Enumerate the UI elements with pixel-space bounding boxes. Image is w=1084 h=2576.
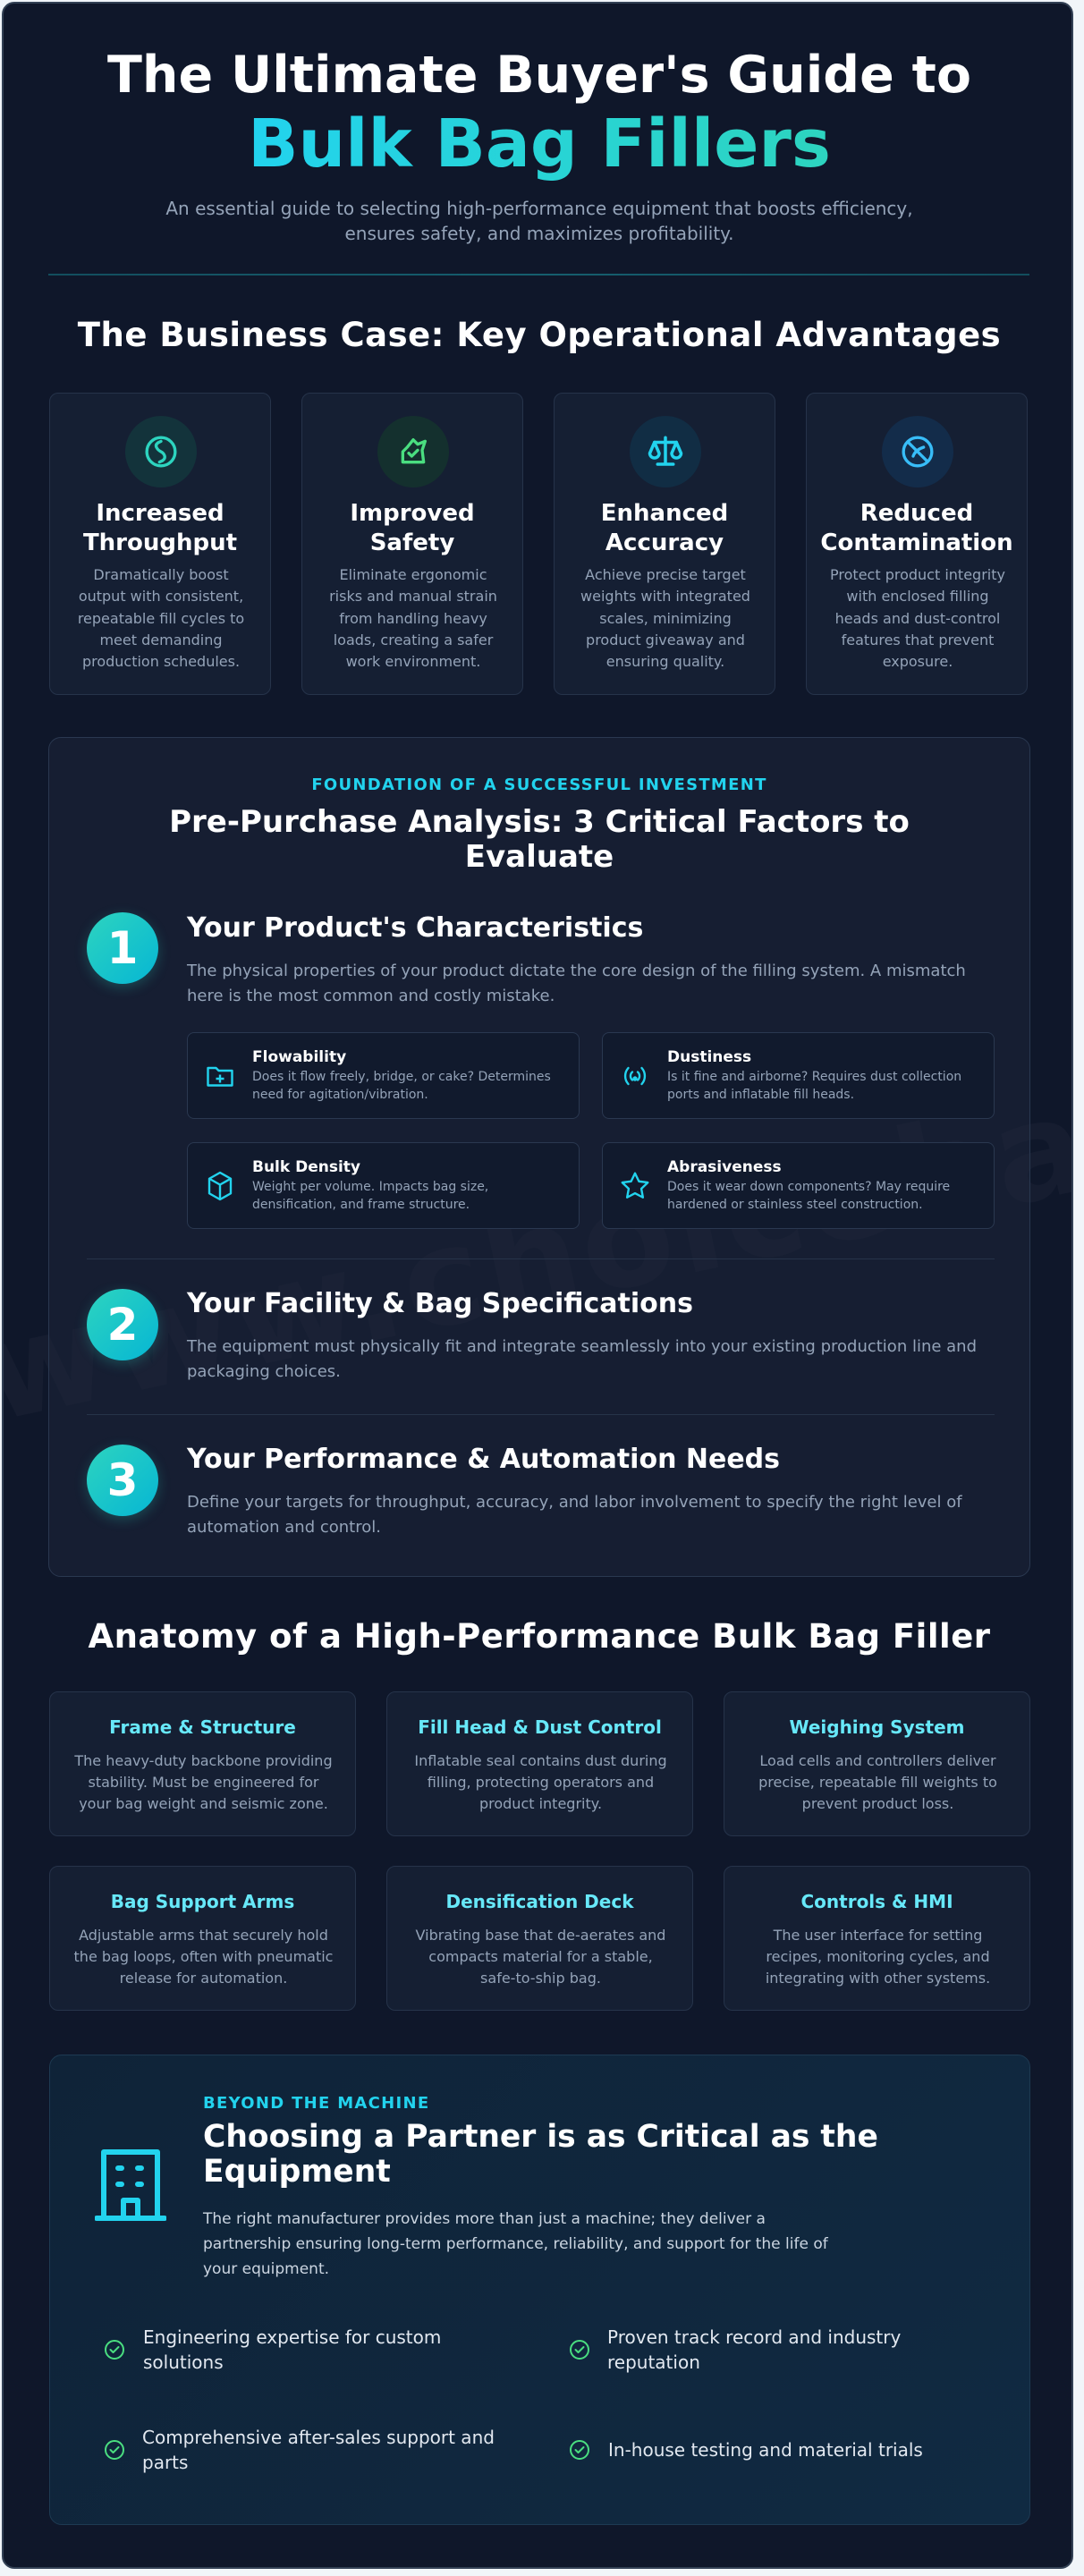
factor text 3: automation and control. [187, 1518, 381, 1537]
subtitle: An essential guide to selecting high-performance equipment that boosts efficiency, [165, 198, 913, 219]
icon: safety [377, 416, 449, 487]
panel: advantage reduced contamination [806, 393, 1028, 695]
title: The Ultimate Buyer's Guide to [107, 46, 971, 105]
anatomy card: densification: Densification Deck [445, 1891, 634, 1912]
anatomy card: weighing: Weighing System [789, 1716, 964, 1738]
anatomy card: fill head [386, 1691, 693, 1836]
anatomy card: fill head: Fill Head & Dust Control [418, 1716, 662, 1738]
anatomy card: controls: Controls & HMI [800, 1891, 953, 1912]
heading: Choosing a Partner is as Critical as the [203, 2119, 878, 2155]
heading: Evaluate [465, 839, 614, 875]
anatomy card: frame: Frame & Structure [109, 1716, 296, 1738]
panel: advantage improved safety: Improved [350, 500, 475, 527]
panel: advantage increased throughput: Throughput [83, 530, 237, 556]
factor heading 1: Your Product's Characteristics [187, 912, 643, 944]
number 2: 2 [107, 1299, 138, 1351]
heading [203, 2119, 878, 2190]
check item 1 [105, 2326, 441, 2373]
check item 1: Engineering expertise for custom [143, 2326, 441, 2348]
sub card: flowability: Flowability [252, 1048, 346, 1066]
check item 3 [105, 2427, 495, 2473]
checklist [105, 2326, 923, 2473]
eyebrow: BEYOND THE MACHINE [203, 2094, 429, 2113]
panel: advantage increased throughput: Increased [96, 500, 224, 527]
anatomy card: weighing [724, 1691, 1030, 1836]
factor text 1: The physical properties of your product dictate the core design of the filling system. A mismatch [187, 962, 966, 980]
section heading: business case: The Business Case: Key Operational Advantages [78, 316, 1001, 354]
section heading: anatomy: Anatomy of a High-Performance Bulk Bag Filler [88, 1617, 991, 1656]
factor text 2 [186, 1337, 977, 1381]
subtitle: ensures safety, and maximizes profitability. [344, 223, 734, 244]
anatomy card: frame: The heavy-duty backbone providing stability. Must be engineered for your bag weight and seismic zone. [74, 1752, 333, 1812]
heading: Pre-Purchase Analysis: 3 Critical Factors to [169, 804, 910, 840]
icon: signal [624, 1066, 646, 1086]
factor heading 2: Your Facility & Bag Specifications [187, 1288, 693, 1319]
sub card: dustiness: Dustiness [667, 1048, 751, 1066]
panel: advantage improved safety: Safety [370, 530, 454, 556]
sub card: abrasiveness: Does it wear down components? May require hardened or stainless steel construction. [667, 1180, 950, 1212]
sub card: bulk density [187, 1142, 580, 1229]
anatomy card: weighing: Load cells and controllers deliver precise, repeatable fill weights to prevent product loss. [758, 1752, 997, 1812]
number 3 [87, 1445, 158, 1516]
anatomy card: controls: The user interface for setting recipes, monitoring cycles, and integrating with other systems. [766, 1927, 990, 1987]
title highlight: Bulk Bag Fillers [248, 106, 831, 182]
icon: scale [630, 416, 701, 487]
icon: folder plus [207, 1066, 233, 1087]
sub card: bulk density: Bulk Density [252, 1158, 360, 1176]
check item 2: Proven track record and industry [607, 2326, 901, 2348]
factor 3 [82, 1444, 962, 1537]
panel: advantage increased throughput: Dramatically boost output with consistent, repeatable fill cycles to meet demanding production schedules. [78, 566, 244, 670]
anatomy card: fill head: Inflatable seal contains dust during filling, protecting operators and product integrity. [414, 1752, 667, 1812]
panel: advantage reduced contamination: Contamination [820, 530, 1013, 556]
panel: advantage increased throughput [49, 393, 271, 695]
icon: building [95, 2149, 166, 2221]
sub card: flowability [187, 1032, 580, 1119]
check item 1: solutions [143, 2351, 224, 2373]
number 1: 1 [107, 922, 138, 974]
icon: throughput [125, 416, 197, 487]
anatomy card: bag support [49, 1866, 356, 2011]
number 1 [87, 912, 158, 984]
panel: partner [49, 2055, 1030, 2525]
text: The right manufacturer provides more than just a machine; they deliver a [203, 2210, 766, 2228]
factor 1 [82, 911, 995, 1229]
check item 2: reputation [607, 2351, 700, 2373]
panel: advantage enhanced accuracy: Enhanced [601, 500, 728, 527]
eyebrow: FOUNDATION OF A SUCCESSFUL INVESTMENT [311, 775, 767, 794]
anatomy card: bag support: Bag Support Arms [111, 1891, 294, 1912]
factor text 3: Define your targets for throughput, accuracy, and labor involvement to specify the right level of [187, 1493, 962, 1512]
factor text 2: packaging choices. [187, 1362, 341, 1381]
panel: advantage reduced contamination: Protect product integrity with enclosed filling heads and dust-control features that prevent exposure. [830, 566, 1005, 670]
anatomy card: controls [724, 1866, 1030, 2011]
factor text 3 [187, 1493, 962, 1537]
sub card: flowability: Does it flow freely, bridge, or cake? Determines need for agitation/vibration. [252, 1070, 551, 1102]
panel: advantage improved safety [301, 393, 523, 695]
anatomy card: densification: safe-to-ship bag. [480, 1970, 601, 1987]
check item 3: parts [142, 2452, 188, 2473]
text: partnership ensuring long-term performance, reliability, and support for the life of [203, 2235, 828, 2253]
icon: no contamination [882, 416, 953, 487]
factor 2 [82, 1288, 977, 1381]
sub card: bulk density: Weight per volume. Impacts bag size, densification, and frame structure. [252, 1180, 488, 1212]
sub card: abrasiveness [602, 1142, 995, 1229]
anatomy card: densification [386, 1866, 693, 2011]
sub card: abrasiveness: Abrasiveness [667, 1158, 782, 1176]
subtitle [165, 198, 913, 244]
sub card: dustiness: Is it fine and airborne? Requires dust collection ports and inflatable fill heads. [667, 1070, 961, 1102]
number 3: 3 [107, 1454, 138, 1506]
panel: advantage reduced contamination: Reduced [860, 500, 973, 527]
panel: advantage enhanced accuracy [554, 393, 775, 695]
anatomy card: frame [49, 1691, 356, 1836]
sub card: dustiness [602, 1032, 995, 1119]
icon: cube [207, 1172, 233, 1200]
factor text 2: The equipment must physically fit and integrate seamlessly into your existing production line and [187, 1337, 977, 1356]
text: your equipment. [203, 2260, 329, 2278]
panel: advantage enhanced accuracy: Achieve precise target weights with integrated scales, minimizing product giveaway and ensuring quality. [580, 566, 750, 670]
icon: star [621, 1172, 649, 1199]
factor text 1 [186, 962, 966, 1005]
factor heading 3: Your Performance & Automation Needs [187, 1444, 780, 1475]
check item 3: Comprehensive after-sales support and [142, 2427, 495, 2448]
panel: advantage improved safety: Eliminate ergonomic risks and manual strain from handling heavy loads, creating a safer work environment. [329, 566, 497, 670]
text [202, 2210, 828, 2278]
anatomy card: bag support: Adjustable arms that securely hold the bag loops, often with pneumatic release for automation. [74, 1927, 333, 1987]
heading: Equipment [203, 2154, 391, 2190]
factor text 1: here is the most common and costly mistake. [187, 987, 555, 1005]
number 2 [87, 1289, 158, 1360]
anatomy card: densification: Vibrating base that de-aerates and compacts material for a stable, [416, 1927, 665, 1965]
panel: advantage enhanced accuracy: Accuracy [606, 530, 724, 556]
check item 4: In-house testing and material trials [608, 2439, 923, 2461]
check item 2 [570, 2326, 901, 2373]
heading [169, 804, 910, 875]
panel: pre-purchase analysis [48, 737, 1030, 1577]
